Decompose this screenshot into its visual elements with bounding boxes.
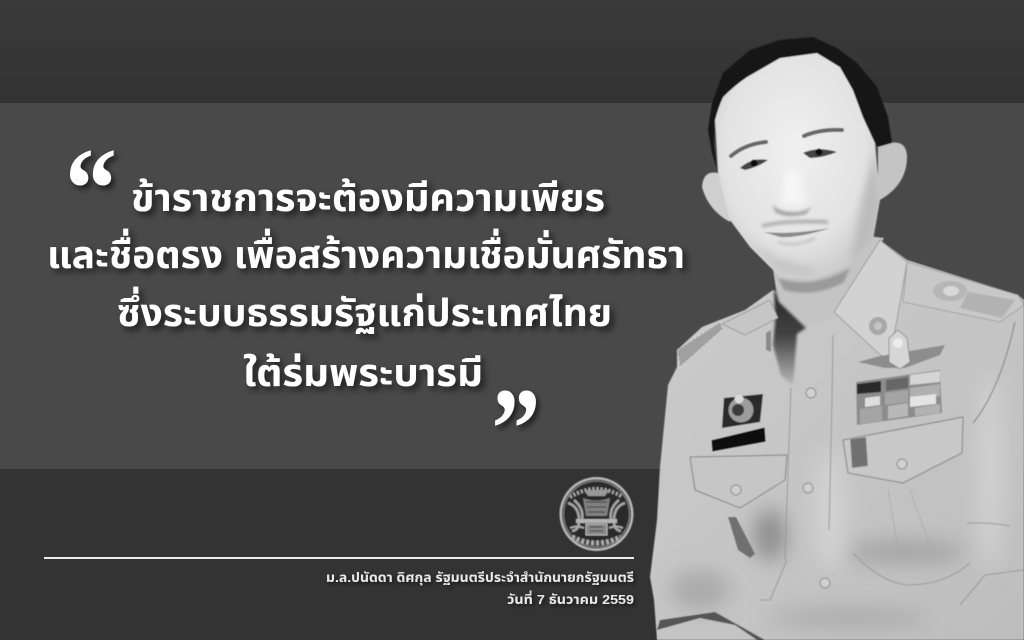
buttons <box>731 388 907 588</box>
lower pin <box>728 517 755 558</box>
icon: government seal <box>560 477 634 551</box>
face shading <box>760 157 880 273</box>
attribution text <box>326 570 634 607</box>
collar left <box>722 300 778 335</box>
hair <box>708 37 892 172</box>
quote text <box>47 178 685 395</box>
left badge <box>722 394 763 428</box>
background band: quote panel <box>0 103 1024 469</box>
uniform shading <box>670 370 1004 628</box>
right ear <box>878 142 907 201</box>
mouth and moustache <box>762 222 830 244</box>
name plate <box>711 427 766 452</box>
small pocket badge <box>850 437 868 468</box>
face <box>715 53 880 280</box>
jaw shadow on neck <box>778 268 850 293</box>
collar pins <box>766 317 887 352</box>
ribbon bar <box>856 370 942 425</box>
left ear <box>702 173 735 222</box>
attribution text: วันที่ 7 ธันวาคม 2559 <box>507 590 634 607</box>
background band: top <box>0 0 1024 103</box>
quote text: ซึ่งระบบธรรมรัฐแก่ประเทศไทย <box>117 286 612 335</box>
placket lines <box>760 322 1024 605</box>
shirt opening shadow <box>773 286 806 386</box>
quote text: และชื่อตรง เพื่อสร้างความเชื่อมั่นศรัทธา <box>47 228 685 277</box>
background band: bottom <box>0 469 1024 640</box>
opening quote mark: “ <box>65 123 117 253</box>
collar right <box>834 240 907 362</box>
left pocket flap <box>690 455 787 508</box>
divider line <box>44 557 634 559</box>
quote text: ใต้ร่มพระบารมี <box>243 353 483 395</box>
neck <box>772 235 884 328</box>
uniform body <box>650 240 1024 640</box>
shoulder board detail <box>933 281 1015 318</box>
attribution text: ม.ล.ปนัดดา ดิศกุล รัฐมนตรีประจำสำนักนายกรัฐมนตรี <box>326 570 634 585</box>
quote text: ข้าราชการจะต้องมีความเพียร <box>131 178 605 220</box>
eyes <box>740 148 837 170</box>
wings badge <box>858 330 945 369</box>
shoulder strap right <box>903 262 1024 322</box>
dark arm crease <box>657 612 765 640</box>
closing quote mark: ” <box>492 365 540 494</box>
shoulder strap left <box>677 322 723 367</box>
eyebrows <box>731 130 842 156</box>
right pocket flap <box>843 417 963 483</box>
portrait: man in uniform <box>650 37 1024 640</box>
